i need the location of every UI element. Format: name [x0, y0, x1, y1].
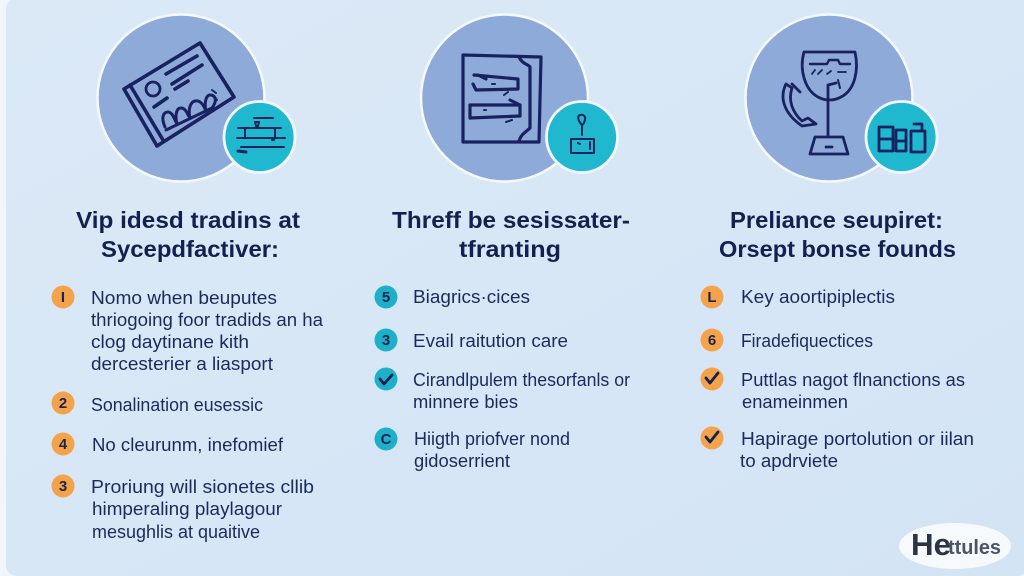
list item 4: C	[381, 431, 392, 448]
icon: goblet and phone in blue circle	[746, 14, 912, 182]
list item 1	[374, 286, 530, 308]
list item 3	[374, 368, 630, 412]
list item 4: Hiigth priofver nond	[414, 429, 570, 449]
list item 2: Sonalination eusessic	[91, 395, 263, 415]
list item 3: 4	[59, 436, 68, 453]
heading: Sycepdfactiver:	[101, 236, 279, 262]
icon: teal badge with lanyard	[546, 102, 618, 172]
list item 1: L	[707, 289, 717, 306]
panel: column one	[52, 14, 324, 542]
list item 1	[52, 286, 324, 374]
list item 2: 3	[382, 332, 390, 349]
logo: ttules	[948, 536, 1001, 559]
list item 1: thriogoing foor tradids an ha	[91, 310, 324, 330]
list item 1	[700, 286, 895, 308]
list item 2	[374, 328, 568, 352]
logo: He	[911, 527, 951, 562]
list item 1: Key aoortipiplectis	[741, 287, 895, 307]
list item 4: to apdrviete	[740, 451, 838, 471]
heading	[392, 207, 630, 262]
list item 1: clog daytinane kith	[91, 332, 249, 352]
heading	[719, 207, 956, 262]
list item 1: 5	[382, 289, 390, 306]
list item 2: Evail raitution care	[413, 331, 568, 351]
heading: tfranting	[459, 236, 561, 262]
list item 1: dercesterier a liasport	[91, 354, 273, 374]
panel: column three	[700, 14, 974, 471]
panel: column two	[374, 14, 630, 471]
heading: Orsept bonse founds	[719, 236, 956, 262]
list item 4: Hapirage portolution or iilan	[741, 429, 974, 449]
list item 3: enameinmen	[742, 392, 848, 412]
list item 4: Proriung will sionetes cllib	[91, 477, 314, 497]
list item 3: No cleurunm, inefomief	[92, 435, 284, 455]
list item 4	[700, 426, 974, 471]
list item 4	[52, 474, 314, 542]
list item 2	[700, 328, 873, 352]
list item 1: I	[61, 289, 65, 306]
icon: teal badge with boxes	[866, 102, 937, 172]
logo	[899, 523, 1011, 569]
list item 3: minnere bies	[413, 392, 518, 412]
list item 3: Puttlas nagot flnanctions as	[741, 370, 965, 390]
list item 2: 6	[708, 332, 716, 349]
list item 4: 3	[59, 478, 67, 495]
list item 1: Biagrics·cices	[413, 287, 530, 307]
list item 1: Nomo when beuputes	[91, 288, 277, 308]
list item 4	[374, 428, 570, 471]
list item 2: Firadefiquectices	[741, 331, 873, 351]
heading: Vip idesd tradins at	[76, 207, 300, 233]
list item 3	[52, 432, 284, 456]
list item 2	[52, 392, 263, 415]
list item 3	[700, 368, 965, 412]
icon: ID card in blue circle	[98, 14, 264, 182]
list item 4: gidoserrient	[414, 451, 510, 471]
heading	[76, 207, 300, 262]
list item 2: 2	[59, 395, 67, 412]
list item 4: mesughlis at quaitive	[92, 522, 260, 542]
list item 4: himperaling playlagour	[92, 499, 282, 519]
icon: folder document in blue circle	[421, 14, 588, 182]
icon: teal badge with table	[224, 102, 295, 172]
heading: Preliance seupiret:	[730, 207, 943, 233]
heading: Threff be sesissater-	[392, 207, 630, 233]
list item 3: Cirandlpulem thesorfanls or	[413, 370, 630, 390]
